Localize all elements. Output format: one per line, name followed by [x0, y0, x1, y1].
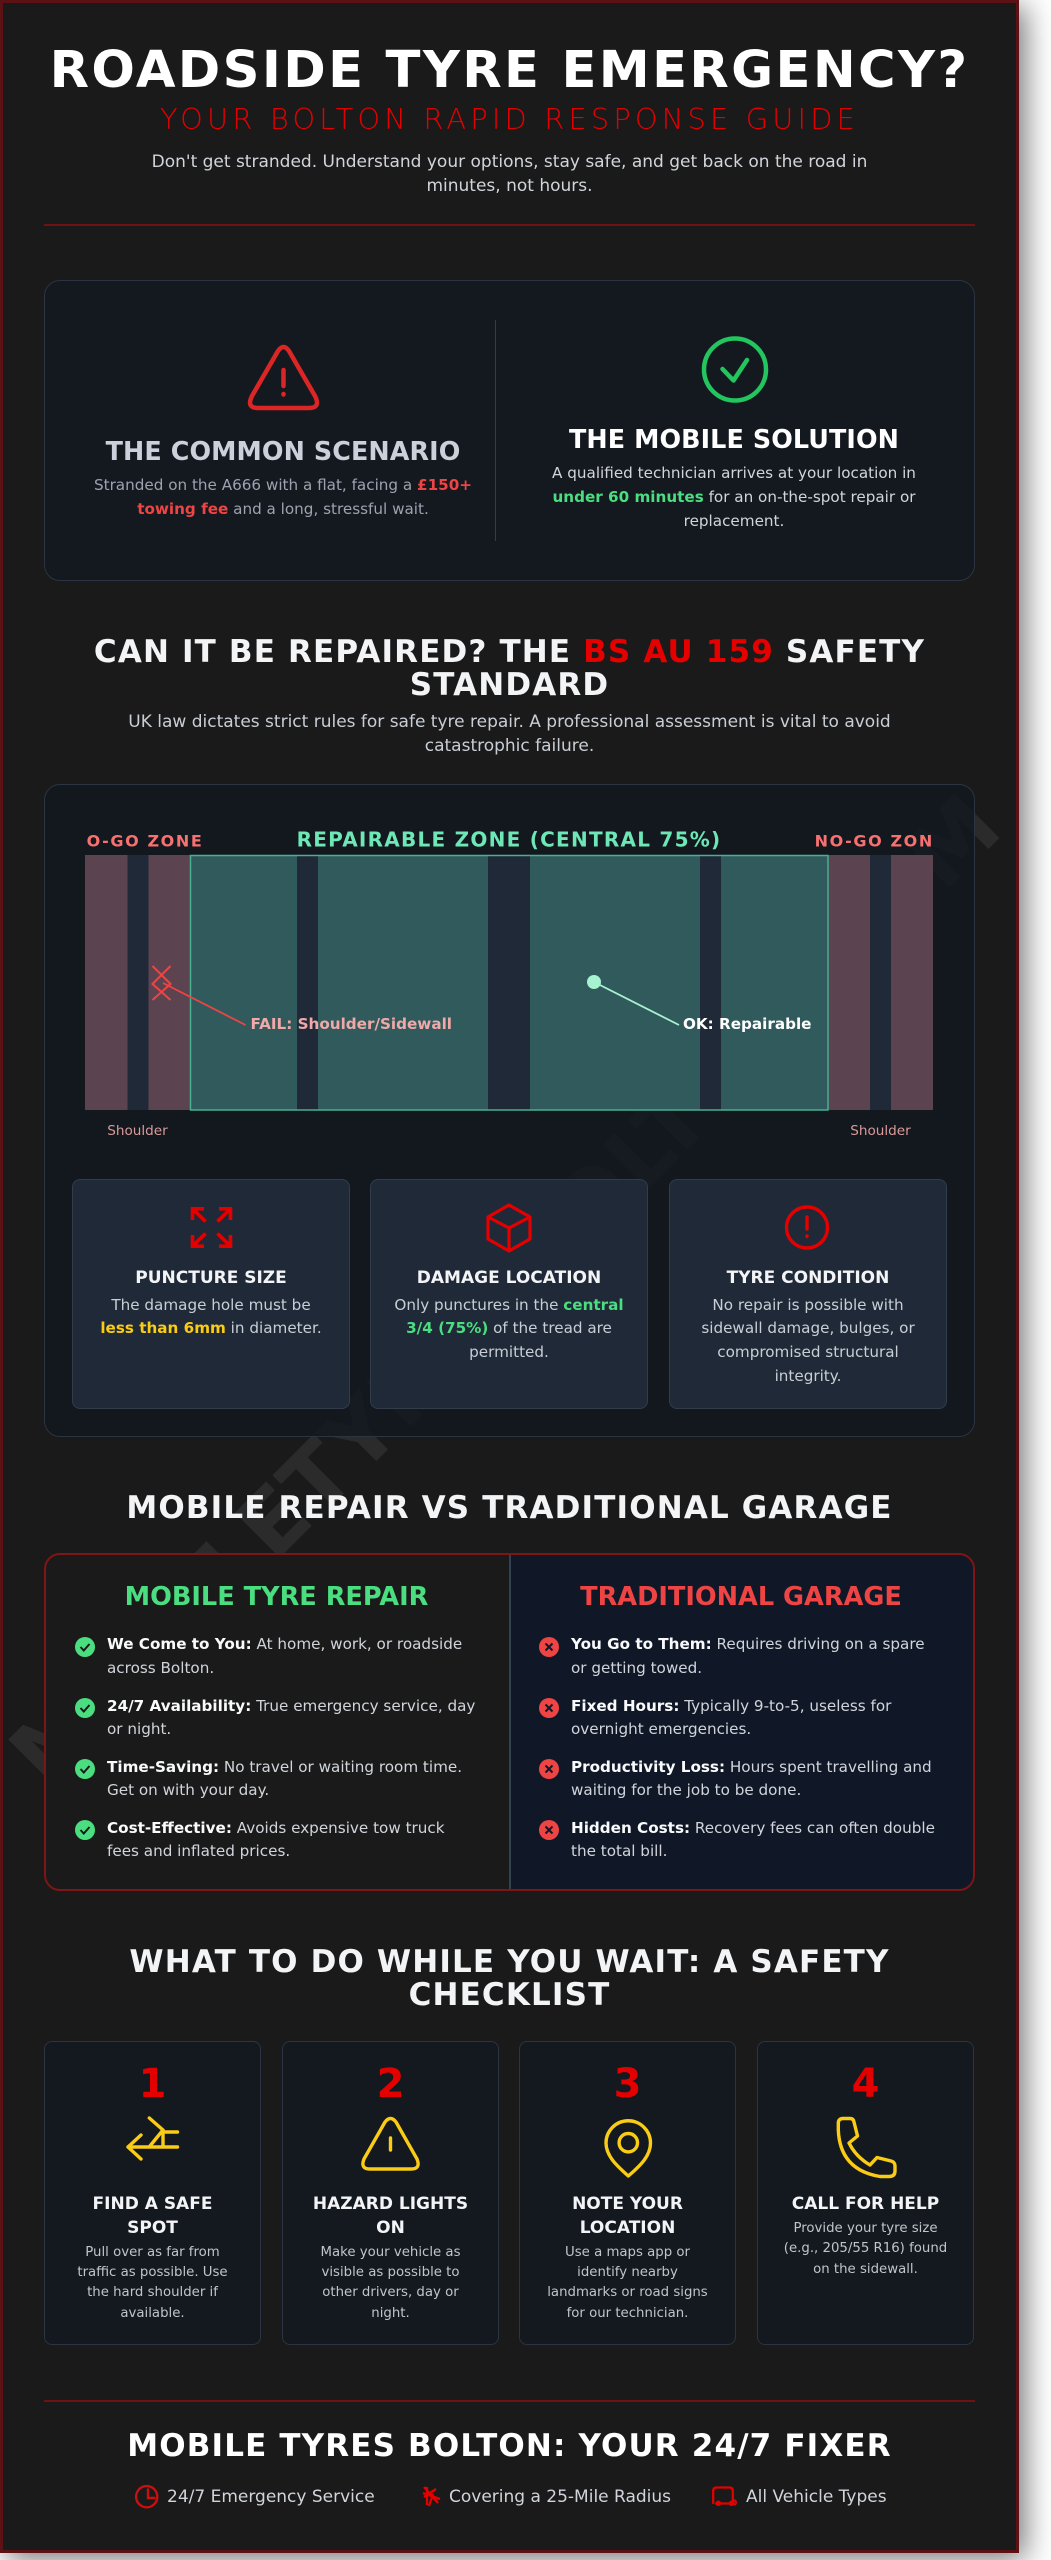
text: step 3: for our technician.: [567, 2306, 688, 2321]
icon: warning triangle: [248, 344, 320, 410]
text: tyre condition: compromised structural: [717, 1343, 899, 1361]
heading: step 2: ON: [376, 2218, 405, 2238]
section heading: comparison: MOBILE REPAIR VS TRADITIONAL GARAGE: [126, 1490, 893, 1526]
right column background: [509, 1555, 979, 1893]
section heading: safety checklist: CHECKLIST: [409, 1977, 610, 2013]
intro text: minutes, not hours.: [426, 176, 593, 196]
footer title: MOBILE TYRES BOLTON: YOUR 24/7 FIXER: [127, 2428, 892, 2464]
text: mobile solution: [552, 464, 916, 530]
text: step 4: [757, 2219, 974, 2280]
text: step 1: Pull over as far from: [85, 2244, 220, 2260]
text: damage location: permitted.: [469, 1343, 549, 1361]
text: fixed hours: overnight emergencies.: [571, 1720, 751, 1738]
card: step 4: [757, 2041, 974, 2345]
text: step 3: landmarks or road signs: [547, 2285, 708, 2300]
tyre tread diagram: FAIL: Shoulder/Sidewall: [250, 1015, 452, 1033]
number 4: 4: [852, 2060, 879, 2106]
text: fixed hours: Fixed Hours: Typically 9-to-5, useless for: [571, 1696, 891, 1714]
icon: vehicle: [710, 2484, 738, 2508]
heading: puncture size: PUNCTURE SIZE: [135, 1268, 287, 1288]
text: radius: Covering a 25-Mile Radius: [449, 2487, 671, 2507]
heading: step 3: [572, 2194, 683, 2238]
text: mobile solution: replacement.: [684, 512, 784, 530]
text: common scenario: Stranded on the A666 with a flat, facing a £150+: [94, 476, 472, 494]
heading: step 2: [313, 2194, 468, 2238]
heading: mobile tyre repair: MOBILE TYRE REPAIR: [125, 1582, 428, 1612]
card: puncture size: [72, 1179, 350, 1409]
number 3: 3: [614, 2060, 641, 2106]
footer divider: [44, 2400, 975, 2402]
text: step 4: Provide your tyre size: [793, 2221, 938, 2236]
text: availability: or night.: [107, 1720, 171, 1738]
section intro: repair standard: catastrophic failure.: [425, 736, 594, 756]
heading: step 1: SPOT: [127, 2218, 178, 2238]
heading: step 3: LOCATION: [580, 2218, 675, 2238]
text: fixed hours: [571, 1696, 892, 1738]
tyre tread diagram: [85, 828, 933, 1139]
text: step 1: [77, 2244, 228, 2321]
text: step 4: on the sidewall.: [813, 2262, 918, 2277]
heading: tyre condition: TYRE CONDITION: [727, 1268, 889, 1288]
text: step 1: the hard shoulder if: [87, 2285, 218, 2300]
header divider: [44, 224, 975, 226]
icon: cross 1: [539, 1637, 559, 1657]
text: time-saving: Time-Saving: No travel or waiting room time.: [107, 1758, 462, 1776]
text: puncture size: [100, 1296, 322, 1337]
text: tyre condition: No repair is possible with: [712, 1296, 904, 1314]
panel: scenario vs solution: [44, 280, 975, 581]
text: tyre condition: sidewall damage, bulges, or: [701, 1319, 915, 1337]
text: productivity loss: [571, 1758, 932, 1799]
text: time-saving: Get on with your day.: [107, 1781, 269, 1799]
text: time-saving: [107, 1758, 462, 1799]
icon: check 3: [75, 1759, 95, 1779]
icon: check 2: [75, 1698, 95, 1718]
text: we come to you: across Bolton.: [107, 1659, 214, 1677]
text: we come to you: We Come to You: At home, work, or roadside: [107, 1635, 462, 1653]
heading: step 2: HAZARD LIGHTS: [313, 2194, 468, 2214]
card: step 3: [519, 2041, 736, 2345]
card: damage location: [370, 1179, 648, 1409]
text: cost-effective: fees and inflated prices.: [107, 1842, 290, 1860]
text: cost-effective: [107, 1818, 445, 1860]
text: puncture size: The damage hole must be: [111, 1296, 311, 1314]
text: step 2: other drivers, day or: [322, 2285, 459, 2300]
tyre tread diagram: REPAIRABLE ZONE (CENTRAL 75%): [297, 828, 721, 852]
text: step 3: [547, 2244, 708, 2321]
card: step 2: [282, 2041, 499, 2345]
text: availability: [107, 1696, 475, 1738]
heading: mobile solution: THE MOBILE SOLUTION: [569, 424, 899, 454]
number 1: 1: [139, 2060, 166, 2106]
section heading: safety checklist: [129, 1944, 890, 2013]
text: you go to them: or getting towed.: [571, 1659, 702, 1677]
heading: damage location: DAMAGE LOCATION: [417, 1268, 601, 1288]
text: tyre condition: integrity.: [775, 1367, 841, 1385]
text: common scenario: towing fee and a long, stressful wait.: [137, 500, 429, 518]
text: you go to them: [570, 1635, 925, 1677]
text: emergency service: 24/7 Emergency Service: [167, 2487, 375, 2507]
text: step 1: available.: [120, 2306, 185, 2321]
subtitle: YOUR BOLTON RAPID RESPONSE GUIDE: [160, 102, 859, 136]
tyre tread diagram: Shoulder: [107, 1123, 168, 1139]
text: step 1: traffic as possible. Use: [77, 2265, 228, 2280]
text: productivity loss: waiting for the job to be done.: [571, 1781, 801, 1799]
icon: hazard triangle: [361, 2116, 420, 2171]
section heading: repair standard: [94, 634, 925, 703]
text: damage location: [394, 1296, 624, 1361]
icon: alert circle: [784, 1205, 830, 1250]
icon: phone: [834, 2115, 898, 2179]
text: we come to you: [107, 1635, 462, 1677]
text: vehicle types: All Vehicle Types: [746, 2487, 887, 2507]
heading: common scenario: THE COMMON SCENARIO: [106, 436, 460, 466]
icon: map scribble: [420, 2484, 442, 2509]
tyre tread diagram: Shoulder: [850, 1123, 911, 1139]
icon: pull over arrow: [126, 2116, 180, 2161]
text: step 2: night.: [371, 2306, 410, 2321]
text: mobile solution: A qualified technician arrives at your location in: [552, 464, 916, 482]
icon: expand arrows: [190, 1207, 232, 1248]
title: ROADSIDE TYRE EMERGENCY?: [50, 40, 969, 100]
section intro: repair standard: [128, 712, 891, 756]
text: hidden costs: [571, 1818, 935, 1860]
text: cost-effective: Cost-Effective: Avoids expensive tow truck: [107, 1818, 445, 1836]
watermark: MOBILETYRESBOLTON.COM: [0, 774, 1021, 1805]
section heading: repair standard: STANDARD: [410, 667, 609, 703]
panel: repair standard: [44, 784, 975, 1437]
tyre tread diagram: OK: Repairable: [683, 1015, 811, 1033]
card: tyre condition: [669, 1179, 947, 1409]
heading: step 4: CALL FOR HELP: [792, 2194, 939, 2214]
text: step 2: visible as possible to: [321, 2265, 460, 2280]
text: tyre condition: [701, 1296, 915, 1385]
icon: check 1: [75, 1637, 95, 1657]
heading: step 1: FIND A SAFE: [93, 2194, 212, 2214]
icon: location pin: [604, 2119, 652, 2178]
icon: clock: [134, 2484, 160, 2510]
icon: cross 3: [539, 1759, 559, 1779]
intro text: Don't get stranded. Understand your options, stay safe, and get back on the road in: [152, 152, 867, 172]
text: hidden costs: the total bill.: [571, 1842, 667, 1860]
text: you go to them: You Go to Them: Requires driving on a spare: [571, 1635, 925, 1653]
text: step 2: [320, 2244, 461, 2321]
section intro: repair standard: UK law dictates strict rules for safe tyre repair. A professional assessment is vital to avoid: [128, 712, 891, 732]
text: hidden costs: Hidden Costs: Recovery fees can often double: [571, 1818, 935, 1836]
number 2: 2: [377, 2060, 404, 2106]
column divider: [495, 320, 496, 541]
heading: step 3: NOTE YOUR: [572, 2194, 683, 2214]
section heading: safety checklist: WHAT TO DO WHILE YOU WAIT: A SAFETY: [129, 1944, 890, 1980]
heading: step 1: [93, 2194, 212, 2238]
heading: traditional garage: TRADITIONAL GARAGE: [580, 1582, 902, 1612]
card: step 1: [44, 2041, 261, 2345]
text: damage location: Only punctures in the central: [394, 1296, 624, 1314]
text: availability: 24/7 Availability: True emergency service, day: [107, 1696, 475, 1714]
text: step 3: identify nearby: [577, 2265, 678, 2280]
text: damage location: 3/4 (75%) of the tread are: [406, 1319, 612, 1337]
icon: check 4: [75, 1820, 95, 1840]
panel: comparison: [44, 1553, 975, 1891]
text: mobile solution: under 60 minutes for an on-the-spot repair or: [552, 488, 916, 506]
section heading: repair standard: CAN IT BE REPAIRED? THE BS AU 159 SAFETY: [94, 634, 925, 670]
text: step 4: (e.g., 205/55 R16) found: [784, 2241, 947, 2256]
icon: cube: [486, 1203, 532, 1253]
text: step 2: Make your vehicle as: [320, 2244, 461, 2260]
text: step 3: Use a maps app or: [565, 2244, 690, 2260]
text: productivity loss: Productivity Loss: Hours spent travelling and: [571, 1758, 932, 1776]
icon: cross 4: [539, 1820, 559, 1840]
icon: cross 2: [539, 1698, 559, 1718]
text: puncture size: less than 6mm in diameter.: [100, 1319, 322, 1337]
intro text: [152, 152, 867, 196]
icon: green check circle: [702, 336, 768, 403]
text: common scenario: [94, 476, 472, 518]
